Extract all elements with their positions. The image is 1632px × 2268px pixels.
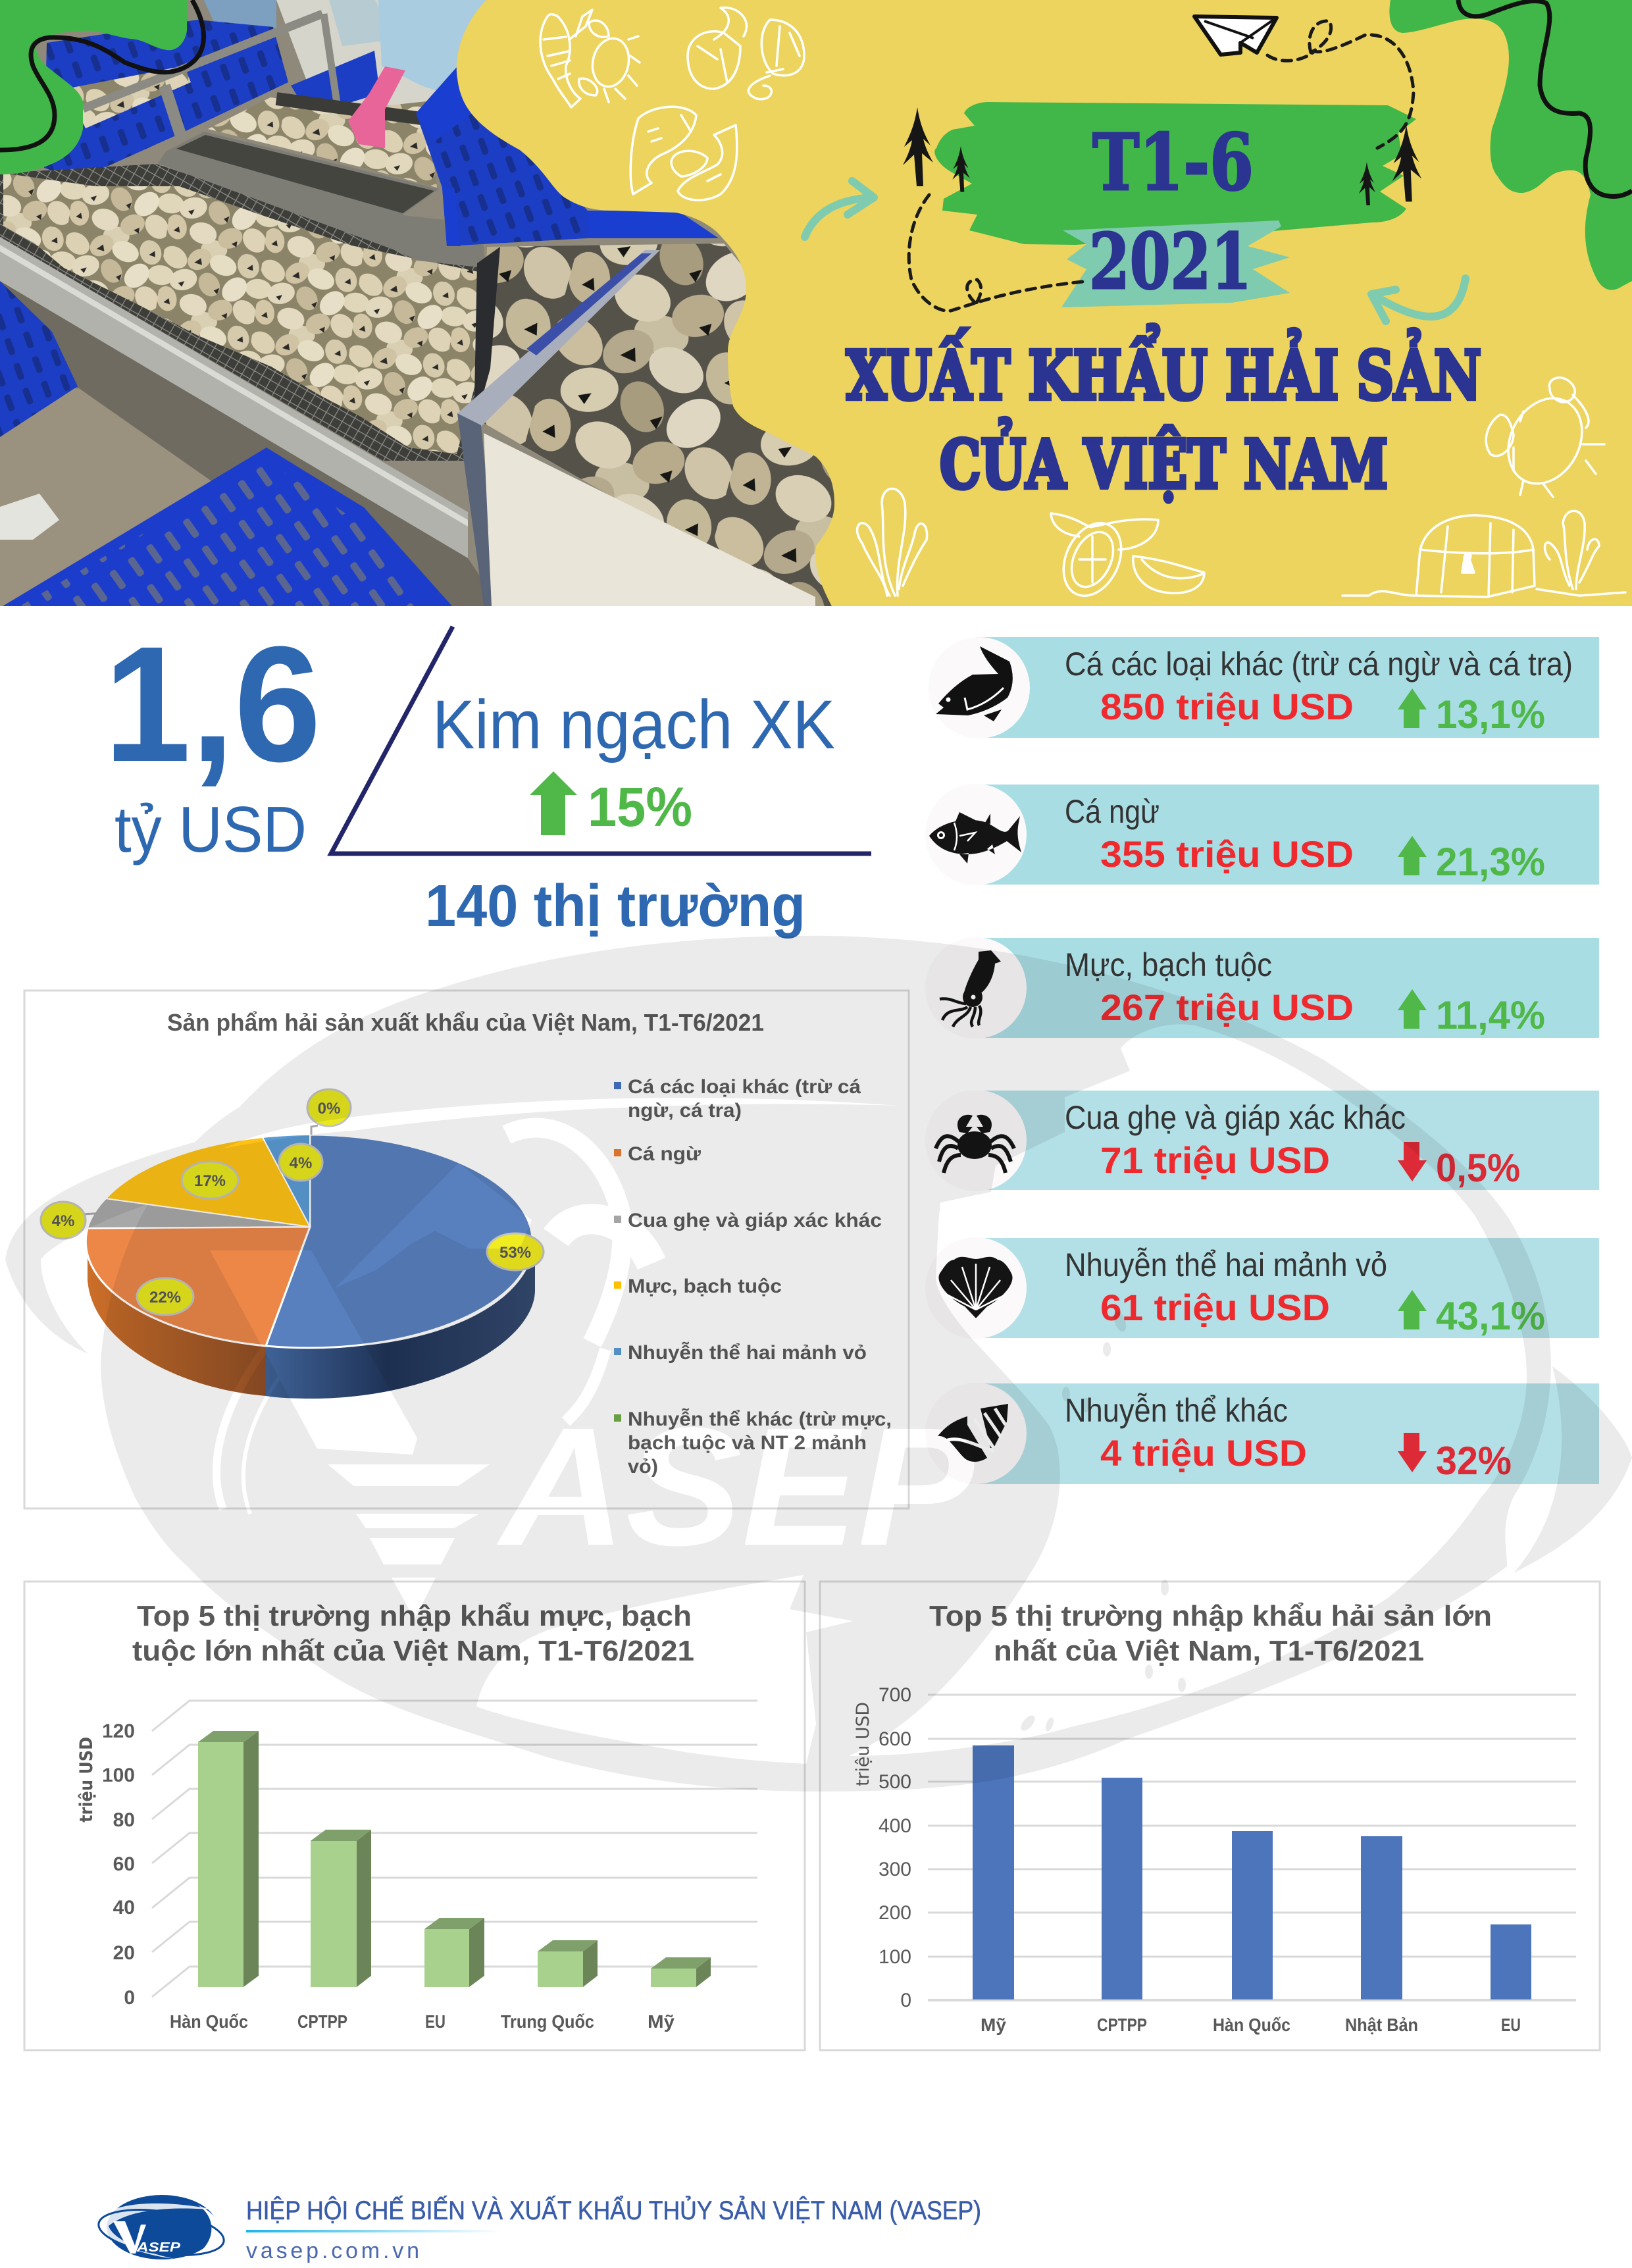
y axis labels: 0 (124, 1987, 135, 2009)
title line 2: CỦA VIỆT NAM (940, 417, 1388, 503)
category labels: CPTPP (1097, 2015, 1147, 2035)
panel: product card 6: 4 triệu USD (1100, 1432, 1307, 1474)
panel: product card 4: Cua ghẹ và giáp xác khác (1065, 1099, 1406, 1136)
panel: product card 4 (925, 1090, 1599, 1191)
panel: pie chart (24, 991, 909, 1508)
footer: VASEP logo (95, 2195, 227, 2262)
category labels: EU (425, 2011, 446, 2032)
panel: product card 5: Nhuyễn thể hai mảnh vỏ (1065, 1247, 1387, 1283)
green blob top left (0, 0, 187, 174)
y axis labels: 20 (113, 1942, 135, 1964)
black curve top right (1458, 0, 1632, 196)
doodle: seaweed left (857, 488, 927, 596)
doodle: pair of fish (630, 107, 737, 200)
pie: orange slice 22% (86, 1227, 310, 1346)
pie legend: Cua ghẹ và giáp xác khác (628, 1210, 882, 1231)
header photo: clam sorting line (0, 0, 849, 606)
watermark: stripes (328, 1464, 490, 1619)
title 2021: 2021 (1089, 217, 1252, 307)
footer: VASEP logo: ASEP (136, 2240, 181, 2255)
category labels: Mỹ (648, 2011, 675, 2032)
y axis labels: 40 (113, 1897, 135, 1919)
panel: product card 4: 0,5% (1436, 1146, 1520, 1190)
panel: product card 2: Cá ngừ (1065, 793, 1160, 830)
3D bars (198, 1731, 711, 1987)
y axis title: triệu USD (76, 1737, 97, 1822)
y axis labels: 120 (102, 1720, 135, 1742)
panel: product card 2 (925, 784, 1599, 885)
y axis labels: 500 (879, 1771, 911, 1793)
watermark: white outlines (217, 1127, 651, 1514)
y axis labels: 400 (879, 1815, 911, 1837)
y axis labels: 100 (102, 1765, 135, 1786)
panel: product card 5: 61 triệu USD (1100, 1287, 1330, 1328)
green up arrow (530, 771, 577, 835)
data labels: 4% (52, 1212, 74, 1230)
chart title: Top 5 thị trường nhập khẩu mực, bạch (137, 1600, 692, 1632)
stat: export label: Kim ngạch XK (432, 686, 835, 763)
category labels: Nhật Bản (1345, 2015, 1418, 2035)
footer: rule (246, 2230, 503, 2232)
tree icons (903, 107, 1421, 205)
pie legend: Cá ngừ (628, 1143, 701, 1165)
panel: product card 3: 267 triệu USD (1100, 987, 1354, 1028)
gridlines (152, 1701, 757, 1997)
doodle: crab right (1486, 378, 1604, 497)
chart title (929, 1600, 1492, 1667)
panel: product card 3 (925, 937, 1599, 1039)
pie legend: Nhuyễn thể hai mảnh vỏ (628, 1341, 867, 1364)
data labels (41, 1089, 544, 1315)
teal brush behind 2021 (1061, 220, 1290, 307)
panel: product card 4: 71 triệu USD (1100, 1139, 1330, 1181)
panel: seafood markets bar chart (820, 1582, 1600, 2050)
doodle: lemon slices (1051, 513, 1204, 605)
y axis labels (879, 1684, 911, 2011)
data labels: 0% (318, 1100, 340, 1118)
category labels (170, 2011, 675, 2032)
black curve top left (0, 0, 204, 150)
green blob top right (1389, 0, 1632, 290)
watermark: droplets (1019, 1310, 1186, 1733)
y axis labels: 80 (113, 1809, 135, 1831)
stat: total value: 1,6 (104, 612, 321, 796)
panel: squid and octopus markets bar chart (24, 1582, 805, 2050)
panel: product card 2: 355 triệu USD (1100, 833, 1354, 875)
footer: organisation name: HIỆP HỘI CHẾ BIẾN VÀ XUẤT KHẨU THỦY SẢN VIỆT NAM (VASEP) (246, 2194, 981, 2225)
watermark: V letter right arm (335, 1163, 532, 1288)
watermark: left crescent (5, 1104, 905, 1354)
y axis labels: 200 (879, 1902, 911, 1924)
y axis labels (102, 1720, 135, 2009)
pie chart title: Sản phẩm hải sản xuất khẩu của Việt Nam, T1-T6/2021 (167, 1009, 764, 1036)
footer: website: vasep.com.vn (246, 2238, 419, 2263)
panel: product card 5 (925, 1237, 1599, 1339)
stat: unit: tỷ USD (115, 793, 307, 865)
dashed route and paper plane (909, 16, 1414, 311)
panel: product card 1: 13,1% (1436, 692, 1545, 736)
stat: markets: 140 thị trường (425, 873, 805, 939)
chart title: nhất của Việt Nam, T1-T6/2021 (994, 1635, 1424, 1667)
chart title: tuộc lớn nhất của Việt Nam, T1-T6/2021 (132, 1635, 694, 1667)
header yellow background shape (457, 0, 1632, 606)
panel: product card 6: Nhuyễn thể khác (1065, 1392, 1288, 1429)
panel: product card 6: 32% (1436, 1439, 1512, 1483)
pie: light blue slice 4% (263, 1135, 310, 1227)
pie legend: Mực, bạch tuộc (628, 1276, 782, 1297)
pie: blue slice 53% (266, 1135, 532, 1348)
y axis title: triệu USD (853, 1702, 873, 1786)
chart title: Top 5 thị trường nhập khẩu hải sản lớn (929, 1600, 1492, 1632)
doodle: shrimps (688, 8, 804, 99)
y axis labels: 0 (900, 1990, 911, 2011)
watermark: white interior behind lower chart title (476, 1575, 853, 1764)
panel: product card 5: 43,1% (1436, 1294, 1545, 1338)
watermark: white swoosh (223, 1098, 899, 1148)
pie legend (614, 1076, 892, 1478)
watermark: wordmark: ASEP (496, 1393, 975, 1581)
pie: grey slice 4% (88, 1198, 310, 1228)
teal arrows (805, 181, 1466, 321)
y axis labels: 700 (879, 1684, 911, 1706)
pie legend: Cá các loại khác (trừ cá (628, 1076, 861, 1098)
pie: leader lines (82, 1125, 318, 1214)
panel: product card 3: Mực, bạch tuộc (1065, 946, 1272, 983)
gridlines (928, 1695, 1576, 2000)
panel: product card 2: 21,3% (1436, 840, 1545, 884)
watermark: VASEP logo (5, 936, 1632, 1791)
data labels: 4% (290, 1154, 312, 1172)
pie legend: ngừ, cá tra) (628, 1100, 742, 1121)
doodle: seaweed right (1545, 511, 1599, 589)
panel: product card 1 (929, 637, 1599, 738)
category labels (981, 2015, 1521, 2035)
pie: orange side (88, 1228, 266, 1396)
y axis labels: 600 (879, 1728, 911, 1750)
panel: product card 3: 11,4% (1436, 993, 1545, 1037)
category labels: CPTPP (297, 2011, 347, 2032)
y axis labels: 60 (113, 1853, 135, 1875)
doodle: treasure chest (1342, 515, 1625, 597)
data labels: 22% (149, 1289, 181, 1306)
category labels: Hàn Quốc (1213, 2015, 1290, 2035)
pie legend: vỏ) (628, 1456, 658, 1478)
category labels: Mỹ (981, 2015, 1006, 2035)
angled divider line (331, 627, 871, 854)
panel: product card 1: 850 triệu USD (1100, 686, 1354, 727)
panel: product card 1: Cá các loại khác (trừ cá ngừ và cá tra) (1065, 646, 1573, 683)
data labels: 53% (499, 1244, 531, 1262)
pie: blue side (266, 1244, 535, 1399)
category labels: Trung Quốc (501, 2011, 594, 2032)
y axis labels: 100 (879, 1946, 911, 1968)
watermark: right crescent (1514, 1366, 1632, 1573)
category labels: Hàn Quốc (170, 2011, 248, 2032)
title T1-6: T1-6 (1092, 116, 1254, 208)
y axis labels: 300 (879, 1859, 911, 1880)
pie: yellow slice 17% (106, 1137, 310, 1227)
category labels: EU (1501, 2015, 1521, 2035)
doodle: crab and shrimp (540, 10, 640, 107)
stat: growth: 15% (588, 776, 692, 838)
green brush behind T1-6 (934, 102, 1416, 245)
watermark: V letter left arm (210, 1250, 417, 1455)
data labels: 17% (194, 1172, 226, 1190)
pie legend: Nhuyễn thể khác (trừ mực, (628, 1408, 892, 1430)
chart title (132, 1600, 694, 1667)
pie legend: bạch tuộc và NT 2 mảnh (628, 1432, 867, 1454)
panel: product card 6 (925, 1383, 1599, 1484)
bars (973, 1745, 1531, 1999)
